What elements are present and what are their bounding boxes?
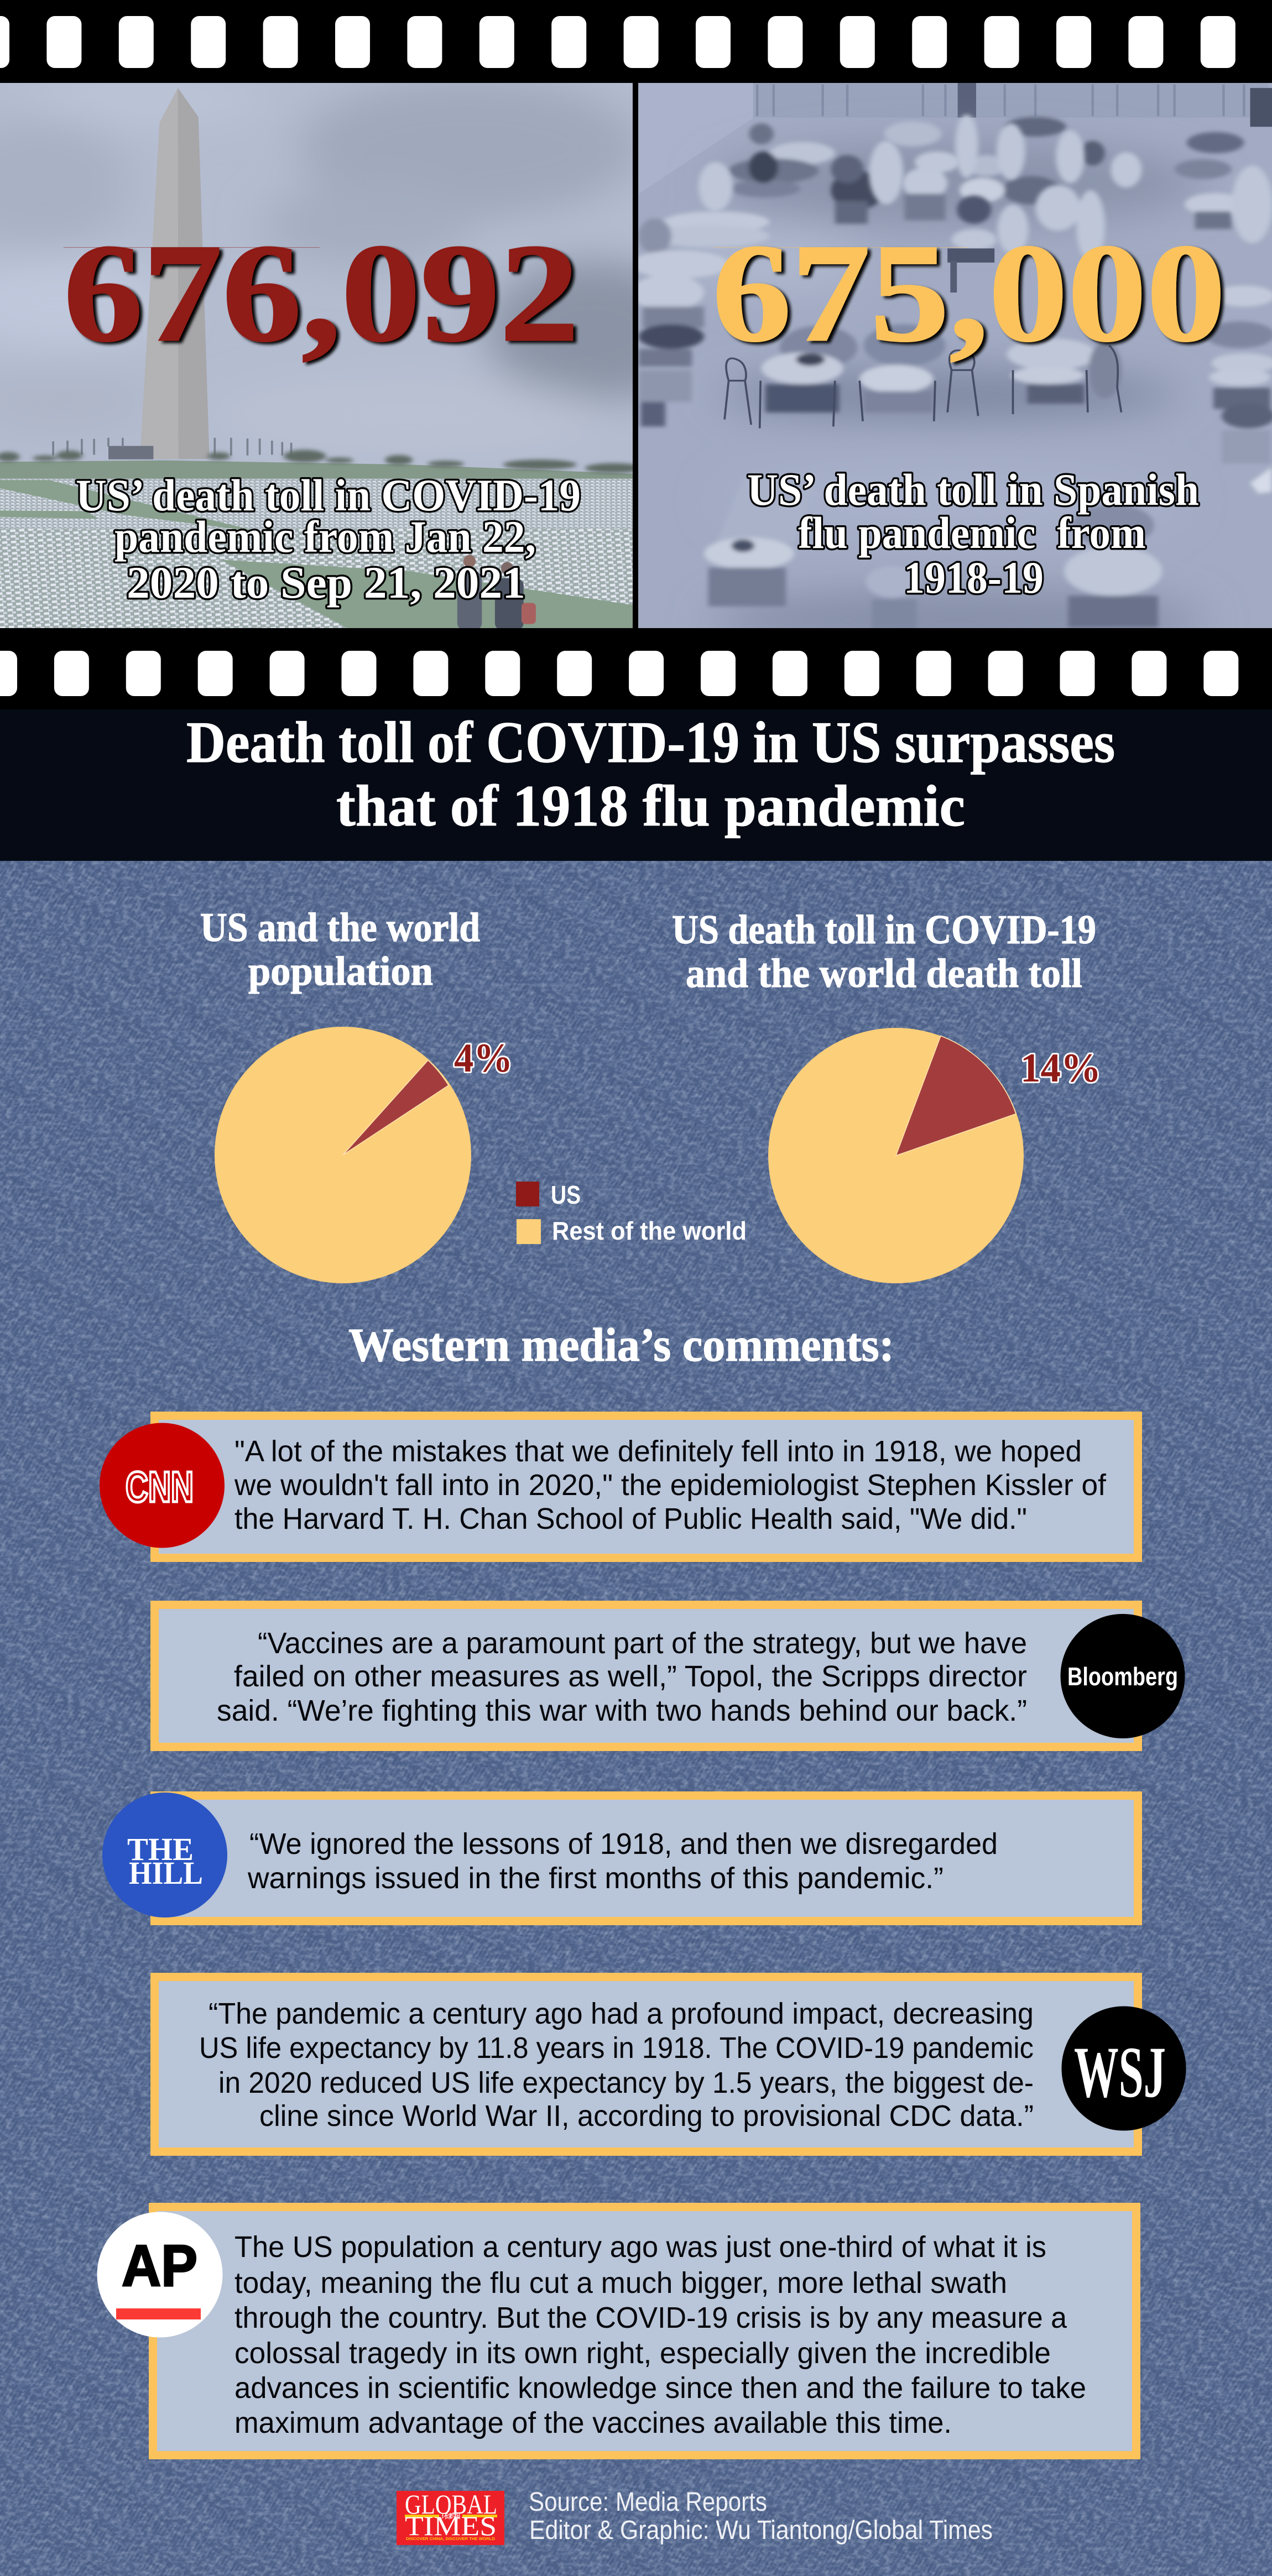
caption: COVID-19: 2020 to Sep 21, 2021: [127, 557, 525, 608]
credits: [529, 2488, 993, 2545]
left side beds: [630, 211, 769, 426]
quote card: CNN: we wouldn't fall into in 2020," the epidemiologist Stephen Kissler of: [234, 1469, 1107, 1502]
heading: population chart: population: [248, 949, 433, 994]
logo: Global Times: 环球时报: [441, 2512, 461, 2520]
quote card: WSJ: US life expectancy by 11.8 years in 1918. The COVID-19 pandemic: [199, 2031, 1034, 2065]
quote card: Bloomberg: [155, 1605, 1185, 1747]
ground: [0, 460, 633, 479]
quote card: AP: through the country. But the COVID-19 crisis is by any measure a: [234, 2301, 1067, 2334]
quote card: WSJ: [155, 1977, 1186, 2152]
quote card: AP: [97, 2207, 1136, 2455]
bottom beds: [704, 476, 1162, 629]
grass paths: [0, 480, 642, 630]
quote card: WSJ: cline since World War II, according to provisional CDC data.”: [259, 2099, 1034, 2133]
heading: population chart: [200, 905, 480, 994]
quote card: The Hill: “We ignored the lessons of 1918, and then we disregarded: [249, 1827, 998, 1861]
caption: Spanish flu: US’ death toll in Spanish: [747, 464, 1199, 515]
tree line: [0, 450, 642, 473]
quote card: Bloomberg: failed on other measures as well,” Topol, the Scripps director: [234, 1660, 1027, 1693]
wall panels: [639, 82, 753, 194]
quote card: Bloomberg: said. “We’re fighting this war with two hands behind our back.”: [217, 1694, 1027, 1727]
quote card: AP: today, meaning the flu cut a much bigger, more lethal swath: [234, 2266, 1007, 2300]
quote card: The Hill: warnings issued in the first months of this pandemic.”: [247, 1862, 943, 1895]
heading: media comments: Western media’s comments:: [348, 1318, 894, 1371]
logo: AP: [97, 2212, 222, 2338]
logo: CNN: CNN: [126, 1462, 194, 1511]
logo: Bloomberg: [1061, 1614, 1185, 1738]
logo: The Hill: THE: [127, 1831, 194, 1867]
logo: WSJ: [1062, 2006, 1186, 2131]
logo: Global Times: GLOBAL: [405, 2489, 497, 2520]
quote card: AP: advances in scientific knowledge since then and the failure to take: [234, 2371, 1086, 2405]
big number: COVID-19 death toll: 676,092: [64, 215, 579, 370]
film strip: top: [0, 0, 1272, 83]
quote card: AP: maximum advantage of the vaccines available this time.: [234, 2406, 952, 2439]
title band: Death toll of COVID-19 in US surpasses: [186, 710, 1115, 775]
pie chart: population 4%: [215, 1027, 513, 1283]
quote card: CNN: the Harvard T. H. Chan School of Public Health said, "We did.": [234, 1502, 1027, 1535]
pie chart: death toll 14%: [768, 1028, 1101, 1283]
logo: Bloomberg: Bloomberg: [1067, 1662, 1178, 1691]
quote card: CNN: [100, 1415, 1138, 1558]
big number: Spanish flu death toll: 675,000: [712, 215, 1226, 370]
logo: The Hill: HILL: [129, 1855, 203, 1891]
quote card: AP: colossal tragedy in its own right, especially given the incredible: [234, 2337, 1051, 2370]
credits: Source: Media Reports: [529, 2488, 767, 2517]
heading: death toll chart: and the world death toll: [686, 951, 1082, 996]
page background: denim texture: [0, 861, 1272, 2576]
title band: [0, 709, 1272, 861]
legend: US: [551, 1180, 581, 1209]
photo panel: 1918 flu hospital ward: [630, 82, 1272, 652]
caption: COVID-19: [76, 470, 581, 608]
caption: COVID-19: US’ death toll in COVID-19: [76, 470, 581, 520]
logo: Global Times: TIMES: [405, 2510, 497, 2541]
nurses in white: [698, 114, 1272, 261]
flag field: [0, 479, 642, 531]
logo: Global Times: [397, 2489, 504, 2545]
logo: WSJ: WSJ: [1074, 2031, 1166, 2113]
quote card: WSJ: in 2020 reduced US life expectancy by 1.5 years, the biggest de-: [218, 2066, 1034, 2099]
heading: death toll chart: US death toll in COVID-19: [672, 907, 1096, 953]
title band: that of 1918 flu pandemic: [336, 774, 965, 838]
logo: Global Times: DISCOVER CHINA, DISCOVER THE WORLD: [406, 2537, 495, 2541]
photo panel: COVID-19, Washington Monument and flags: [0, 83, 633, 628]
floor shading: [684, 141, 1203, 652]
obelisk: [140, 88, 178, 459]
quote card: The Hill: [102, 1793, 1138, 1921]
divider between photos: [633, 83, 638, 628]
upper ward beds and dark blankets: [729, 117, 1246, 229]
caption: COVID-19: pandemic from Jan 22,: [114, 511, 536, 562]
visitors: [457, 555, 536, 630]
quote card: Bloomberg: “Vaccines are a paramount part of the strategy, but we have: [258, 1627, 1027, 1660]
film strip: bottom: [0, 628, 1272, 710]
caption: Spanish flu: [747, 464, 1199, 603]
front beds: [762, 324, 1122, 412]
quote card: AP: The US population a century ago was just one-third of what it is: [234, 2230, 1046, 2264]
chairs and bed frames: [724, 346, 1122, 429]
quote card: WSJ: “The pandemic a century ago had a profound impact, decreasing: [208, 1997, 1034, 2030]
pie chart: population 4%: 4%: [454, 1036, 513, 1081]
sky clouds: [0, 83, 633, 414]
logo: The Hill: [102, 1793, 227, 1917]
pie chart: death toll 14%: 14%: [1020, 1046, 1101, 1091]
caption: Spanish flu: 1918-19: [904, 552, 1044, 603]
quote card: CNN: "A lot of the mistakes that we definitely fell into in 1918, we hoped: [234, 1435, 1082, 1468]
logo: CNN: [100, 1423, 225, 1548]
flower table: [947, 196, 997, 292]
right side beds: [1205, 285, 1272, 494]
logo: AP: AP: [122, 2233, 197, 2298]
credits: Editor & Graphic: Wu Tiantong/Global Times: [529, 2516, 993, 2545]
heading: death toll chart: [672, 907, 1096, 996]
heading: population chart: US and the world: [200, 905, 480, 950]
caption: Spanish flu: flu pandemic from: [798, 508, 1146, 558]
legend: Rest of the world: [552, 1216, 747, 1245]
flags and visitor building: [108, 446, 153, 459]
legend: [516, 1180, 747, 1245]
